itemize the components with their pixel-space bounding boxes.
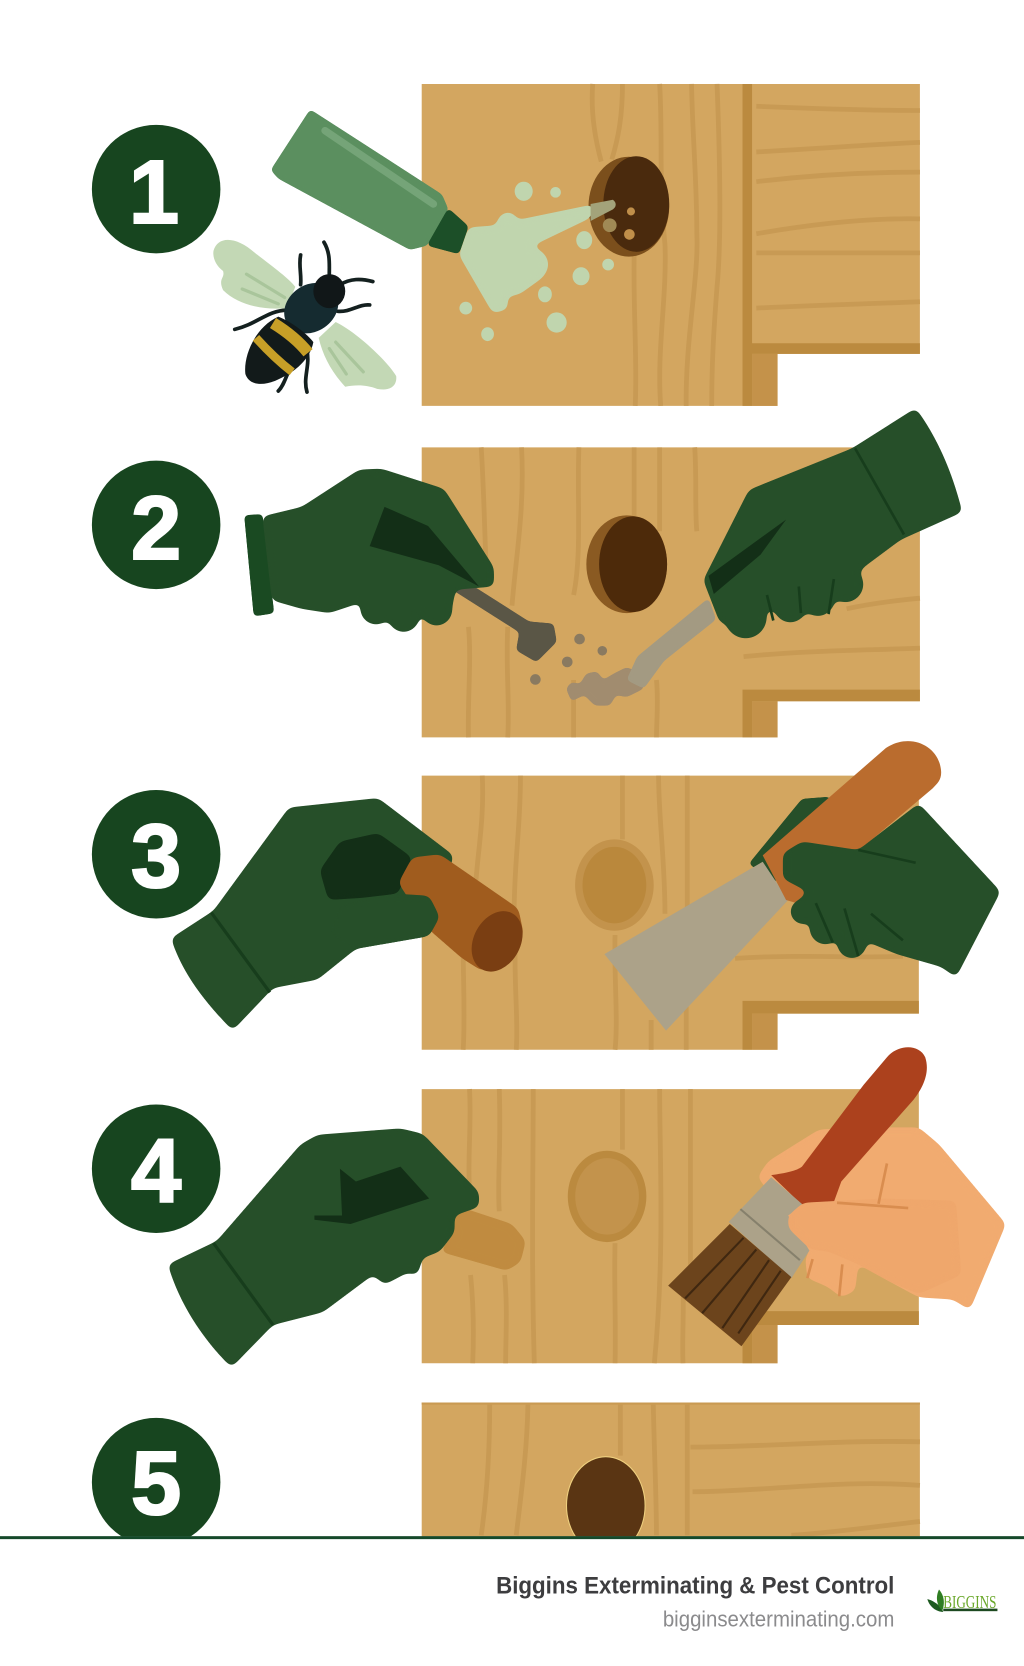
wood board 3 — [422, 776, 919, 1050]
wood board 2 — [422, 447, 920, 737]
right glove step 3 — [783, 803, 1001, 978]
painter's bare hand back — [757, 1127, 1006, 1310]
filled hole 4 — [568, 1151, 646, 1242]
debris and dust — [530, 634, 644, 706]
website: bigginsexterminating.com — [663, 1607, 894, 1632]
right glove step 2 — [703, 408, 962, 639]
wood board 5 — [422, 1402, 920, 1537]
Biggins logo — [927, 1590, 997, 1612]
left glove step 3 — [171, 798, 454, 1031]
thumb holding plug — [329, 894, 440, 949]
step 2 number badge: 2 — [131, 478, 181, 579]
dust bottle — [271, 109, 468, 254]
footer rule — [0, 1536, 1024, 1539]
dust spray — [459, 182, 635, 341]
left glove step 4 — [168, 1128, 479, 1367]
paint brush — [668, 1047, 927, 1346]
wood board 4 — [422, 1089, 919, 1363]
Biggins logo: BIGGINS — [943, 1592, 996, 1612]
step 3 number badge — [92, 790, 220, 919]
step 3 number badge: 3 — [131, 806, 181, 907]
step 2 number badge — [92, 461, 220, 589]
dark chisel — [444, 584, 557, 662]
wood board 1 — [422, 84, 920, 406]
wood dowel plug — [398, 854, 533, 980]
hole 2 — [586, 515, 667, 613]
step 4 number badge — [92, 1104, 220, 1233]
sanded dowel — [423, 1198, 526, 1271]
filled hole 3 — [575, 839, 654, 931]
putty knife — [604, 741, 941, 1031]
carpenter bee hole — [588, 156, 669, 257]
painter's thumb — [788, 1163, 961, 1296]
footer background — [0, 1536, 1024, 1666]
step 4 panel — [92, 1047, 1006, 1367]
step 5 number badge: 5 — [131, 1433, 181, 1534]
company name: Biggins Exterminating & Pest Control — [496, 1573, 894, 1600]
glove cuff seam — [211, 913, 270, 992]
sealed hole 5 — [566, 1457, 645, 1554]
bee — [213, 240, 396, 392]
light scraper tool — [627, 598, 716, 688]
step 5 number badge — [92, 1418, 220, 1546]
left glove step 2 — [244, 469, 494, 632]
footer — [0, 1536, 1024, 1666]
step 2 panel — [92, 408, 962, 737]
step 1 number badge: 1 — [129, 142, 179, 243]
step 4 number badge: 4 — [131, 1121, 181, 1222]
step 1 panel — [92, 84, 920, 406]
step 3 panel — [92, 741, 1001, 1050]
step 5 panel — [92, 1402, 920, 1554]
glove palm shadow — [320, 833, 412, 900]
step 1 number badge — [92, 125, 220, 253]
